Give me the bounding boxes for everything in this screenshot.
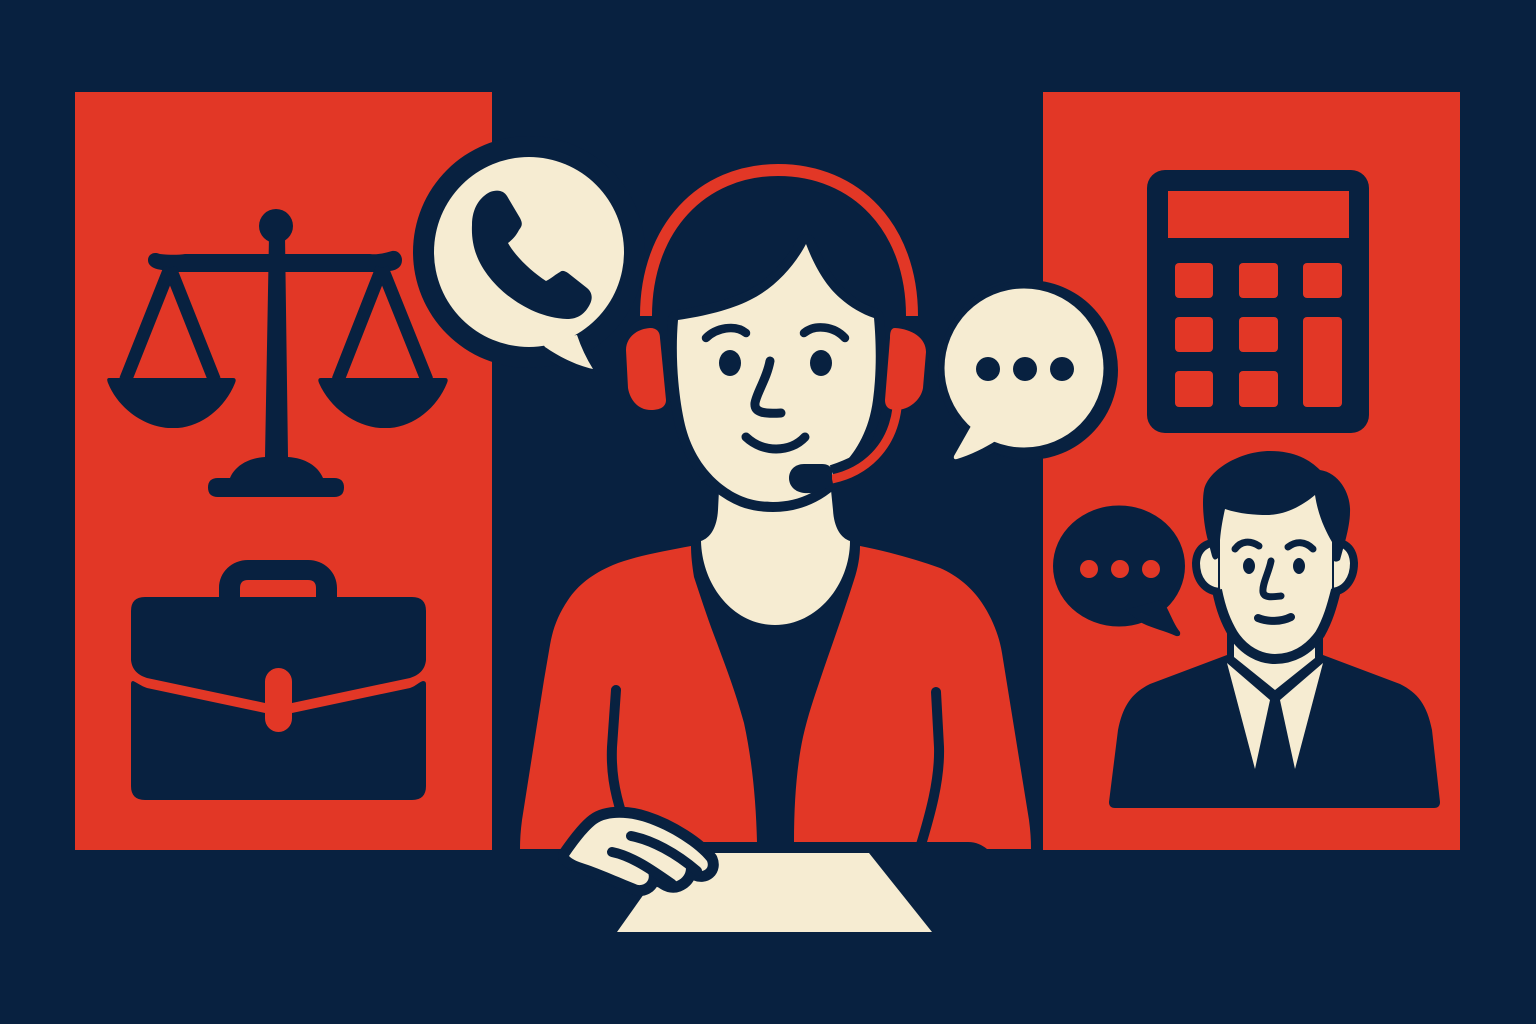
headset right ear cup: [885, 328, 926, 410]
headset microphone: [789, 464, 832, 493]
icon: scales of justice: [107, 209, 448, 497]
advisor hand: [569, 818, 708, 885]
advisor nose and mouth: [746, 361, 805, 449]
headset microphone boom: [832, 448, 875, 472]
icon: small speech bubble with client: [1053, 506, 1185, 636]
icon: phone speech bubble: [413, 136, 645, 369]
advisor jacket left: [520, 546, 757, 849]
icon: dots speech bubble: [938, 280, 1118, 460]
advisor sleeve folds: [612, 690, 939, 848]
headset band: [646, 170, 912, 316]
advisor neck: [701, 490, 850, 625]
client suit: [1109, 630, 1440, 808]
paper sheet: [617, 853, 932, 932]
client face: [1220, 495, 1332, 653]
client ears: [1196, 543, 1354, 592]
client features: [1235, 542, 1313, 621]
icon: briefcase: [126, 560, 431, 800]
icon: calculator: [1147, 170, 1369, 433]
figure: woman call-centre advisor: [520, 170, 1031, 849]
advisor eyebrows: [706, 327, 845, 338]
advisor eyes: [719, 350, 832, 376]
advisor face: [677, 244, 876, 502]
advisor jacket right: [794, 546, 1031, 849]
panel: right finance and client: [1043, 92, 1460, 850]
panel: left legal and business: [75, 92, 492, 850]
client collar and shirt: [1227, 640, 1323, 769]
client hair: [1203, 451, 1350, 562]
figure: male client: [1109, 451, 1440, 808]
headset left ear cup: [626, 328, 666, 410]
